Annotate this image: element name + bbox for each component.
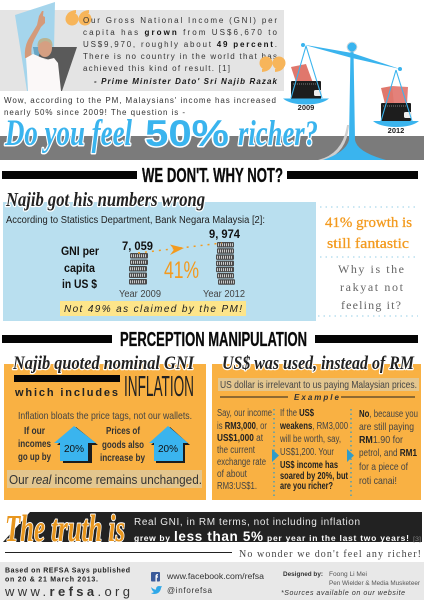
text: facebook address: www.facebook.com/refsa <box>166 572 265 581</box>
label: year 2012: Year 2012 <box>203 289 245 300</box>
quote text: achieved this kind of result. [1] <box>83 64 230 73</box>
value: 41%: 41% <box>164 257 199 284</box>
label: 2012: 2012 <box>388 126 404 135</box>
icon: twitter <box>151 586 162 594</box>
text: prices go up: Prices of <box>106 425 140 437</box>
quote attribution: - Prime Minister Dato' Sri Najib Razak <box>94 77 278 86</box>
inflation statement: Inflation bloats the price tags, not our wallets. <box>18 410 192 422</box>
orange statement: 41% growth is <box>325 215 412 231</box>
dotted divider with arrow <box>272 409 279 497</box>
headline: do you feel 50% richer: Do you feel <box>4 113 133 154</box>
footer: sources note: *Sources available on our website <box>281 590 405 597</box>
quote text <box>83 16 278 73</box>
photo: prime minister pointing <box>15 2 77 91</box>
icon: facebook <box>151 572 160 582</box>
coin stack: 2012 <box>216 242 235 285</box>
example column 3: RM1.90 for <box>359 434 403 446</box>
grey question: rakyat not <box>340 280 404 294</box>
example column 3: roti canai! <box>359 475 397 487</box>
section heading: perception manipulation <box>2 329 418 351</box>
example column 1: of about <box>217 469 247 480</box>
headline: do you feel 50% richer: 50% <box>145 113 229 154</box>
icon: balance scale <box>283 42 419 160</box>
icon: opening quote mark <box>66 10 92 26</box>
example column 3: for a piece of <box>359 461 408 473</box>
icon: closing quote mark <box>260 56 286 72</box>
section heading: we don't why not: WE DON'T. WHY NOT? <box>142 165 283 187</box>
text: twitter handle: @inforefsa <box>167 586 213 595</box>
text: incomes go up: If our <box>24 425 45 437</box>
subheading: which includes inflation: which includes <box>14 387 118 399</box>
right wallet with banknotes <box>381 86 412 121</box>
text: prices go up: goods also <box>102 439 144 451</box>
icon: up arrow 20% prices: 20% <box>158 444 178 455</box>
example column 2: soared by 20%, but <box>280 471 348 482</box>
example divider: Example <box>294 393 340 402</box>
example column 2 <box>279 408 348 492</box>
section heading: we don't why not <box>2 165 418 187</box>
example column 1: Say, our income <box>217 408 272 419</box>
headline: do you feel 50% richer: richer? <box>238 113 318 153</box>
intro text <box>4 96 276 117</box>
headline: do you feel 50% richer <box>4 113 318 154</box>
footer: credits <box>283 572 420 587</box>
panel: prime minister quote <box>0 2 286 91</box>
grey question <box>338 262 404 312</box>
text: incomes go up <box>18 425 51 463</box>
grey question: Why is the <box>338 262 404 276</box>
panel: nominal gni: INFLATION <box>124 371 194 403</box>
example column 2: If the US$ <box>280 408 314 419</box>
banner title: The truth is <box>5 508 125 550</box>
row label: gni per capita: capita <box>64 261 95 275</box>
arrow: growth <box>138 243 222 255</box>
icon: up arrow 20% prices <box>149 426 190 463</box>
footer: source note: Based on REFSA Says published <box>5 568 130 574</box>
value: 9,974: 9, 974 <box>209 227 240 241</box>
footer: website: www. refsa .org <box>4 584 130 599</box>
label: 2009: 2009 <box>298 103 314 112</box>
grey question: feeling it? <box>341 298 401 312</box>
banner: the truth is <box>3 508 422 550</box>
example column 2: US$1,200. Your <box>280 447 335 458</box>
example column 1: is RM3,000, or <box>217 421 268 432</box>
panel title: Najib got his numbers wrong <box>5 189 205 211</box>
panel title: Najib quoted nominal GNI <box>12 353 195 374</box>
panel: 41% growth side note <box>318 207 418 316</box>
source line: According to Statistics Department, Bank Negara Malaysia [2]: <box>6 215 265 226</box>
row label: gni per capita: in US $ <box>62 277 97 291</box>
example column 1: US$1,000 at <box>217 433 263 444</box>
example column 2: US$ income has <box>280 460 338 471</box>
intro text: nearly 50% since 2009! The question is - <box>4 108 185 117</box>
example column 2: are you richer? <box>280 481 333 492</box>
panel: nominal gni <box>4 353 206 500</box>
coin stack: 2009 <box>129 253 148 284</box>
intro text: Wow, according to the PM, Malaysians' income has increased <box>4 96 276 105</box>
text: prices go up <box>100 425 145 464</box>
footer: source note: on 20 & 21 March 2013. <box>5 576 98 584</box>
example column 1: the current <box>217 445 255 456</box>
example column 1 <box>217 408 272 492</box>
banner text line 2: per year in the last two years! <box>267 533 409 543</box>
quote text: There is no country in the world that has <box>83 52 277 61</box>
text: incomes go up: incomes <box>18 438 51 450</box>
left wallet with banknotes <box>291 64 322 99</box>
footer: credits: Foong Li Mei <box>329 572 367 578</box>
banner text line 2: less than 5% <box>174 529 263 544</box>
subheading: which includes inflation <box>14 371 194 403</box>
quote text: capita has grown from US$6,670 to <box>83 28 278 37</box>
text: incomes go up: go up by <box>18 451 51 463</box>
panel: us dollar used <box>212 353 421 500</box>
icon: up arrow 20% incomes <box>54 426 98 463</box>
example column 3: petrol, and RM1 <box>359 447 417 459</box>
panel: najib got his numbers wrong <box>3 189 316 321</box>
icon: up arrow 20% incomes: 20% <box>64 444 84 455</box>
row label: gni per capita <box>61 244 99 291</box>
example column 3 <box>359 408 418 487</box>
footer: credits: Pen Wielder & Media Musketeer <box>329 581 420 587</box>
footer: credits: Designed by: <box>283 572 323 578</box>
section heading: perception manipulation: PERCEPTION MANIPULATION <box>120 329 307 351</box>
example column 2: weakens, RM3,000 <box>279 421 348 432</box>
callout: not 49%: Not 49% as claimed by the PM! <box>64 304 242 315</box>
example column 1: exchange rate <box>217 457 266 468</box>
grey band behind headline <box>0 136 424 160</box>
footer <box>0 562 424 600</box>
row label: gni per capita: GNI per <box>61 244 99 258</box>
banner text line 2 <box>134 529 421 544</box>
orange statement <box>325 215 412 252</box>
quote text: Our Gross National Income (GNI) per <box>83 16 277 25</box>
banner text line 2: [3] <box>413 536 421 543</box>
footer: source note <box>5 568 130 584</box>
orange statement: still fantastic <box>327 236 409 252</box>
banner text line 1: Real GNI, in RM terms, not including inflation <box>134 517 360 528</box>
quote text: US$9,970, roughly about 49 percent. <box>83 40 277 49</box>
example column 1: RM3:US$1. <box>217 481 257 492</box>
label: year 2009: Year 2009 <box>119 289 161 300</box>
conclusion strip: Our real income remains unchanged. <box>9 472 202 487</box>
example column 2: will be worth, say, <box>279 434 341 445</box>
closing line: no wonder: No wonder we don't feel any richer! <box>239 549 421 560</box>
banner text line 2: grew by <box>134 533 170 543</box>
value: 7,059: 7, 059 <box>122 239 153 253</box>
dotted divider with arrow <box>347 409 354 497</box>
text: prices go up: increase by <box>100 452 145 464</box>
